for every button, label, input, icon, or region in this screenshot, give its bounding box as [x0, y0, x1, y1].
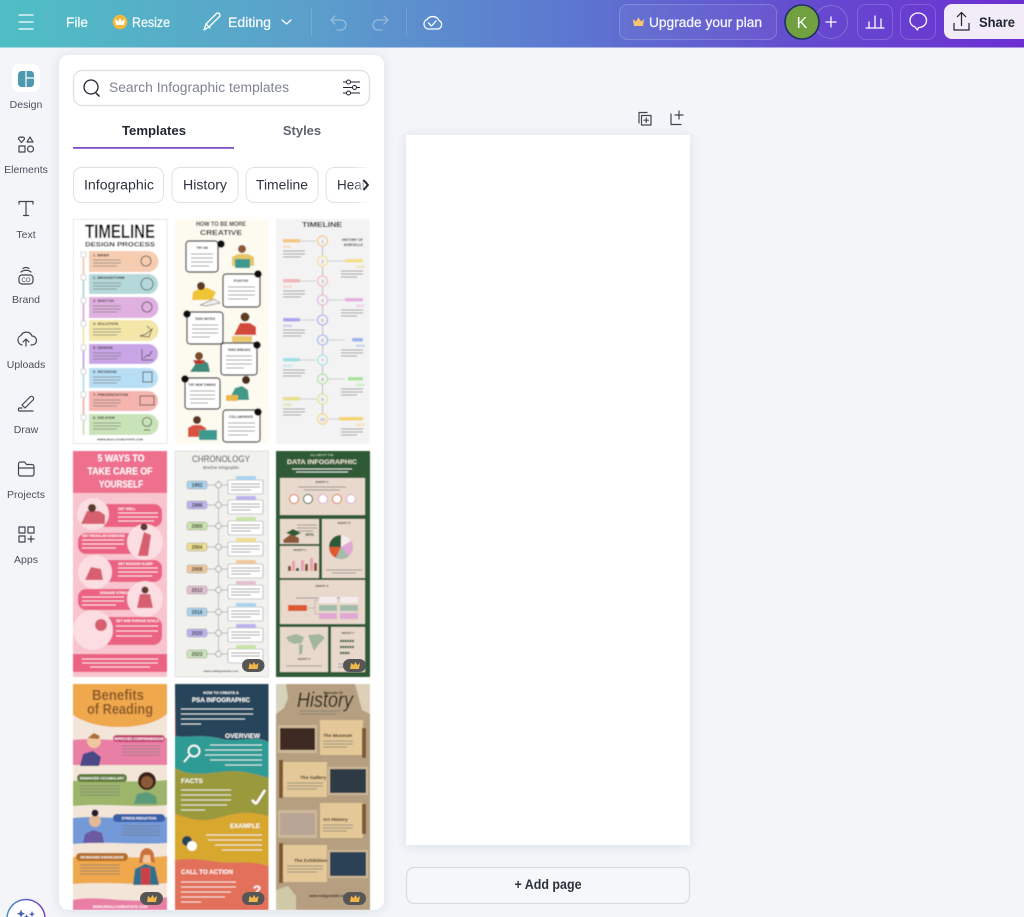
avatar [785, 5, 819, 39]
template: benefits of reading: STRESS REDUCTION [122, 816, 157, 820]
icon: cloud saved [424, 17, 442, 29]
badge: crown data [343, 659, 366, 672]
comments button [900, 4, 936, 40]
template: how to be more creative: COLLABORATE [229, 415, 253, 419]
template: benefits of reading: of Reading [87, 702, 153, 718]
template: 5 ways to take care of yourself: SET AND PURSUE GOALS [116, 619, 160, 623]
template: timeline history of boscelle: BORCELLE [344, 243, 364, 247]
icon: duplicate page [639, 112, 651, 125]
template: chronology: 2020 [191, 631, 203, 637]
sidebar: brand tab [12, 268, 40, 306]
resize button [113, 15, 170, 30]
template: timeline history of boscelle: 2019 [356, 344, 364, 348]
template: benefits of reading: Benefits [92, 688, 144, 704]
template: how to be more creative: TAKE NOTES [195, 317, 215, 321]
template: timeline history of boscelle: 9 [321, 397, 324, 402]
blank canvas page [406, 135, 690, 845]
template: timeline history of boscelle: 3 [321, 279, 324, 284]
badge: crown chronology [242, 659, 264, 672]
sidebar: brand tab: CO [22, 278, 31, 284]
template: 5 ways to take care of yourself: MANAGE STRESS [100, 591, 130, 595]
left sidebar [4, 64, 48, 566]
search box [74, 70, 370, 106]
template: psa infographic: OVERVIEW [225, 733, 261, 740]
template: 5 ways to take care of yourself: GET REGULAR EXERCISE [82, 534, 126, 538]
template: psa infographic: ? [253, 882, 261, 898]
sidebar: text tab [16, 202, 36, 241]
tabs: Styles [283, 123, 321, 138]
template: timeline history of boscelle: 7 [321, 358, 324, 363]
template: how to be more creative: CREATIVE [200, 228, 242, 237]
magic assistant button [7, 900, 45, 917]
add page button: + Add page [514, 877, 582, 892]
upgrade button [620, 4, 776, 40]
template: timeline history of boscelle: 5 [321, 318, 324, 323]
template: timeline history of boscelle: 2022 [283, 403, 291, 407]
template: chronology: CHRONOLOGY [192, 454, 250, 464]
editing mode menu: Editing [228, 15, 271, 30]
template: timeline history of boscelle: 2023 [356, 423, 364, 427]
template: timeline design process: DESIGN PROCESS [85, 242, 156, 248]
template: psa infographic: EXAMPLE [230, 823, 261, 830]
template: museum of history: The Gallery [300, 775, 326, 781]
template: timeline history of boscelle: 10 [320, 417, 325, 422]
template: 5 ways to take care of yourself: GET WELL [118, 507, 136, 511]
template: 5 ways to take care of yourself: YOURSELF [99, 478, 143, 490]
template: psa infographic: CALL TO ACTION [181, 869, 233, 876]
template: psa infographic [175, 684, 268, 910]
template: museum of history: Art History [323, 817, 348, 823]
template: timeline history of boscelle: 2 [321, 259, 324, 264]
template: chronology: timeline infographic [203, 465, 239, 470]
template: data infographic: ALL ABOUT THE [311, 453, 333, 457]
template: timeline design process: TIMELINE [85, 222, 155, 243]
filter chips: Timeline [256, 178, 308, 192]
template: data infographic: INSERT A [316, 480, 328, 484]
template: chronology: 2012 [191, 588, 203, 594]
template: timeline design process [74, 220, 167, 444]
template: benefits of reading: INCREASED KNOWLEDGE [80, 856, 124, 860]
share button [944, 4, 1024, 39]
tabs [73, 123, 321, 149]
template: timeline history of boscelle: 8 [321, 377, 324, 382]
template: museum of history: The Museum [323, 733, 352, 739]
template: timeline design process: 8. DELIVER [93, 415, 115, 420]
search box: Search Infographic templates [109, 80, 289, 95]
template: chronology [175, 451, 268, 677]
template: how to be more creative: POSITIVE [234, 279, 248, 283]
template: timeline history of boscelle: 2021 [356, 383, 364, 387]
filter chips [73, 167, 370, 203]
icon: menu [19, 15, 33, 29]
sidebar: text tab: Text [16, 229, 36, 241]
template: timeline design process: 2. BRAINSTORM [93, 275, 125, 280]
icon: add page [671, 111, 683, 124]
sidebar: uploads tab [7, 332, 45, 371]
template: timeline design process: 7. PRESENTATION [93, 392, 128, 397]
template: museum of history: Museum Of [323, 691, 343, 695]
template: museum of history [276, 684, 370, 910]
template: how to be more creative [175, 219, 268, 444]
template: data infographic: INSERT E [298, 657, 311, 661]
template grid [73, 219, 370, 910]
top toolbar [0, 0, 1024, 48]
template: benefits of reading: WWW.REALLYGREATSITE.COM [93, 905, 147, 909]
template: timeline history of boscelle [276, 219, 370, 444]
template: timeline history of boscelle: 4 [321, 298, 324, 303]
sidebar: projects tab [7, 462, 45, 501]
template: timeline history of boscelle: 6 [321, 338, 324, 343]
filter chips: History [183, 178, 227, 192]
add collaborator button [814, 6, 848, 38]
sidebar: apps tab: Apps [14, 554, 38, 566]
premium badges [140, 659, 366, 905]
template: chronology: 1992 [191, 483, 203, 489]
filter chips: Infographic [84, 178, 154, 192]
template: museum of history: The Exhibition [294, 858, 327, 864]
template: data infographic: DATA INFOGRAPHIC [287, 459, 357, 466]
template: timeline design process: 3. SKETCH [93, 298, 114, 303]
file menu: File [66, 15, 88, 30]
template: data infographic: INSERT F [342, 631, 355, 635]
template: timeline history of boscelle: 2015 [283, 285, 291, 289]
icon: undo [331, 16, 346, 30]
template: timeline history of boscelle: 2013 [356, 265, 364, 269]
badge: crown history [343, 892, 366, 905]
sidebar: draw tab [14, 396, 39, 436]
template: timeline history of boscelle: 1 [321, 239, 324, 244]
template: 5 ways to take care of yourself: GET ENOUGH SLEEP [118, 562, 154, 566]
icon: redo [373, 16, 388, 30]
sidebar: projects tab: Projects [7, 489, 45, 501]
template: how to be more creative: TRY NEW THINGS [188, 383, 216, 387]
template: data infographic: INSERT C [293, 548, 307, 552]
badge: crown psa [242, 892, 264, 905]
template: psa infographic: PSA INFOGRAPHIC [192, 698, 251, 704]
resize button: Resize [132, 15, 170, 30]
add page button [406, 868, 690, 904]
template: chronology: 2000 [191, 524, 203, 530]
template: how to be more creative: TAKE BREAKS [228, 348, 250, 352]
template: timeline history of boscelle: HISTORY OF [342, 238, 364, 242]
template: chronology: 2008 [191, 567, 203, 573]
filter chips: Health [337, 178, 376, 192]
template: timeline design process: 6. REVISION [93, 369, 117, 374]
template: data infographic: INSERT D [315, 584, 329, 588]
template: museum of history: www.reallygreatsite.com [308, 894, 347, 898]
badge: crown reading [140, 892, 163, 905]
sidebar: elements tab: Elements [4, 164, 48, 176]
template: psa infographic: FACTS [181, 778, 204, 785]
sidebar: brand tab: Brand [12, 294, 40, 306]
template: timeline history of boscelle: 2018 [283, 324, 291, 328]
analytics button [858, 4, 892, 40]
template: benefits of reading [73, 684, 167, 910]
template: 5 ways to take care of yourself [73, 451, 167, 677]
template: chronology: 2016 [191, 610, 203, 616]
editing mode menu [204, 13, 291, 30]
canvas page actions [639, 111, 683, 125]
panel: templates [59, 55, 396, 910]
template: benefits of reading: IMPROVED COMPREHENSION [114, 737, 164, 741]
template: 5 ways to take care of yourself: 5 WAYS TO [98, 452, 144, 464]
template: chronology: 1996 [191, 503, 203, 509]
sidebar: draw tab: Draw [14, 424, 39, 436]
avatar: K [797, 15, 808, 32]
share button: Share [979, 15, 1015, 30]
template: chronology: www.reallygreatsite.com [202, 669, 239, 673]
template: timeline history of boscelle: TIMELINE [302, 220, 342, 229]
sidebar: uploads tab: Uploads [7, 359, 45, 371]
template: chronology: 2023 [191, 652, 203, 658]
template: timeline design process: WWW.REALLYGREATSITE.COM [97, 438, 143, 442]
template: data infographic: INSERT B [337, 521, 351, 525]
template: 5 ways to take care of yourself: TAKE CARE OF [88, 466, 153, 478]
template: psa infographic: HOW TO CREATE A [203, 691, 239, 695]
template: timeline history of boscelle: 2011 [283, 245, 291, 249]
template: timeline design process: 4. SOLUTION [93, 321, 118, 326]
template: data infographic [276, 451, 370, 677]
template: benefits of reading: ENHANCED VOCABULARY [80, 776, 125, 780]
template: timeline design process: 5. DESIGN [93, 345, 113, 350]
tabs: Templates [122, 123, 186, 138]
template: chronology: 2004 [191, 545, 203, 551]
template: timeline history of boscelle: 2020 [283, 364, 291, 368]
sidebar: apps tab [14, 527, 38, 566]
template: how to be more creative: HOW TO BE MORE [196, 222, 246, 228]
upgrade button: Upgrade your plan [649, 15, 762, 30]
template: how to be more creative: TRY AN [196, 246, 208, 250]
template: data infographic: 46% [305, 532, 314, 537]
template: museum of history: History [297, 689, 354, 712]
sidebar: elements tab [4, 137, 48, 176]
sidebar: design tab: Design [10, 99, 43, 111]
template: timeline design process: 1. BRIEF [93, 252, 110, 258]
template: timeline history of boscelle: 2017 [356, 304, 364, 308]
sidebar: design tab [10, 64, 43, 111]
